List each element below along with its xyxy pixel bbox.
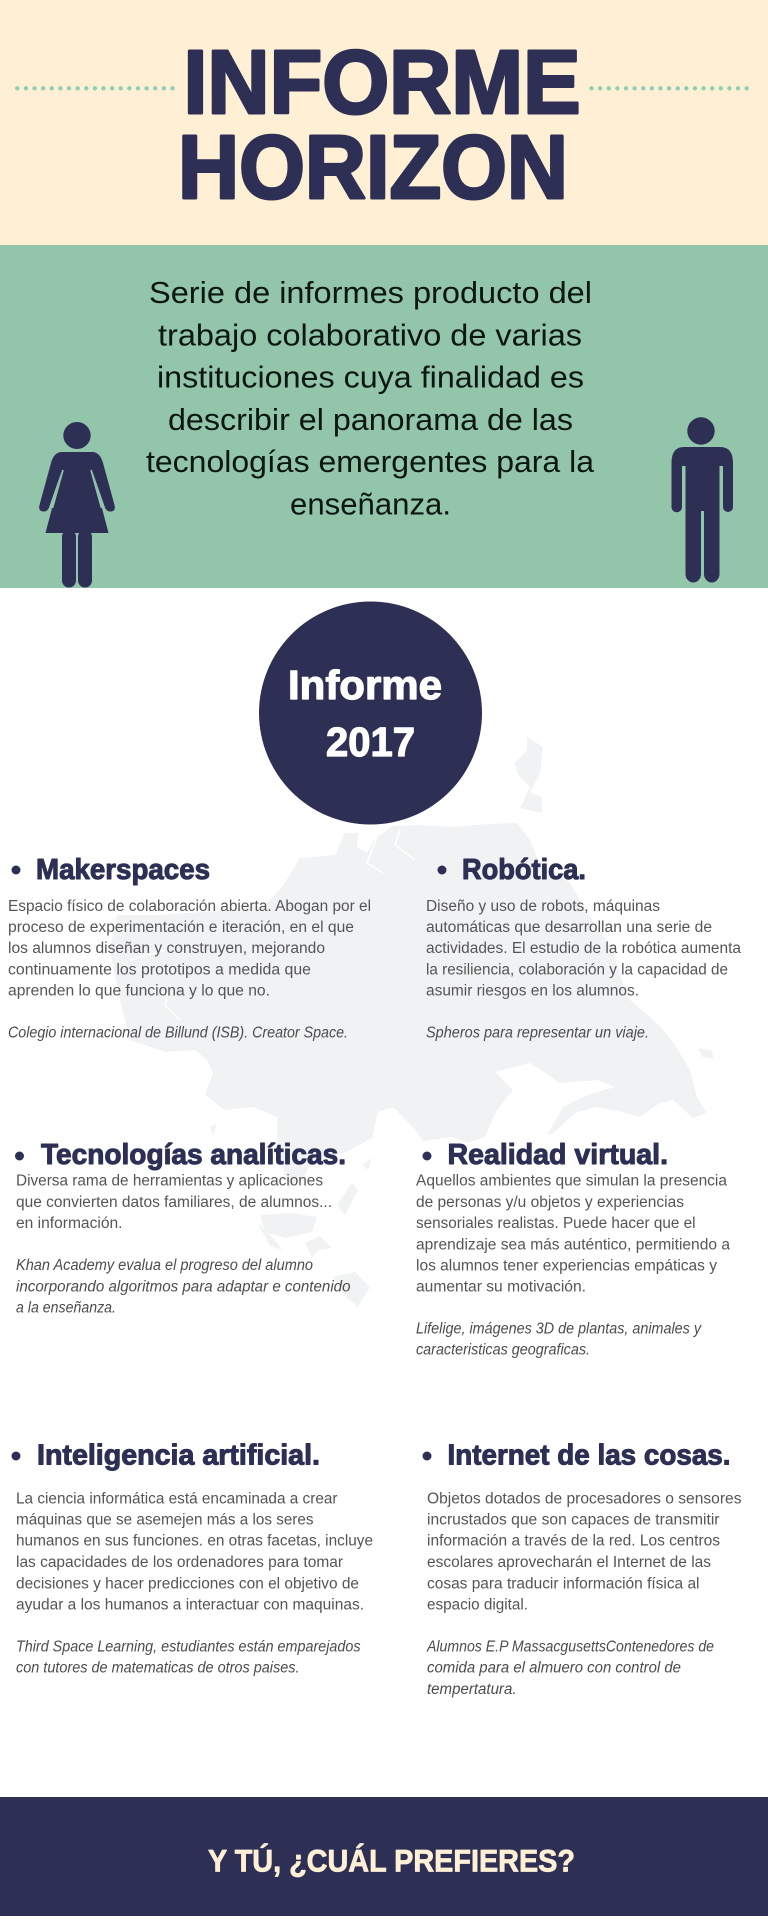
section: Internet de las cosas: Alumnos E.P MassacgusettsContenedores de (426, 1638, 714, 1655)
section: Internet de las cosas: incrustados que son capaces de transmitir (427, 1512, 720, 1529)
section: Makerspaces: Espacio físico de colaboración abierta. Abogan por el (8, 898, 371, 915)
dotted line right (592, 86, 747, 91)
circle badge: Informe 2017 (259, 602, 482, 824)
section: Makerspaces: Makerspaces (36, 854, 210, 886)
section: Robótica: Spheros para representar un viaje. (426, 1025, 649, 1042)
section: Robótica: actividades. El estudio de la robótica aumenta (426, 940, 741, 957)
section: Inteligencia artificial: Inteligencia artificial. (37, 1440, 320, 1472)
title: HORIZON (178, 118, 568, 218)
title (178, 33, 580, 218)
section: Inteligencia artificial: La ciencia informática está encaminada a crear (16, 1490, 338, 1507)
section: Tecnologías analíticas: Tecnologías analíticas. (41, 1139, 346, 1171)
section: Inteligencia artificial (12, 1440, 373, 1677)
intro text: describir el panorama de las (168, 402, 573, 437)
section: Realidad virtual: de personas y/u objetos y experiencias (416, 1194, 684, 1211)
section: Robótica: la resiliencia, colaboración y la capacidad de (426, 962, 728, 978)
panel: header (0, 0, 768, 245)
section: Tecnologías analíticas (15, 1139, 351, 1316)
section: Tecnologías analíticas: incorporando algoritmos para adaptar e contenido (16, 1278, 351, 1295)
section: Makerspaces: continuamente los prototipos a medida que (8, 962, 311, 978)
section: Internet de las cosas: cosas para traducir información física al (427, 1575, 700, 1592)
section: Inteligencia artificial: con tutores de matematicas de otros paises. (16, 1660, 300, 1677)
icon: woman (39, 422, 115, 588)
section: Inteligencia artificial: Third Space Learning, estudiantes están emparejados (16, 1638, 361, 1655)
section: Inteligencia artificial: las capacidades de los ordenadores para tomar (16, 1554, 343, 1571)
section: Robótica: automáticas que desarrollan una serie de (426, 919, 712, 936)
section: Realidad virtual: Realidad virtual. (448, 1139, 668, 1171)
background world map (110, 737, 714, 1307)
section: Makerspaces: proceso de experimentación e iteración, en el que (8, 919, 354, 936)
section: Internet de las cosas: Internet de las cosas. (448, 1440, 730, 1472)
section: Makerspaces (8, 854, 371, 1042)
panel: introduction (0, 245, 768, 588)
section: Inteligencia artificial: máquinas que se asemejen más a los seres (16, 1512, 314, 1529)
intro text: enseñanza. (290, 486, 451, 522)
section: Internet de las cosas: tempertatura. (427, 1681, 516, 1698)
icon: man (672, 417, 733, 582)
section: Internet de las cosas: comida para el almuero con control de (427, 1660, 681, 1677)
section: Makerspaces: los alumnos diseñan y construyen, mejorando (8, 940, 325, 957)
section: Internet de las cosas: información a través de la red. Los centros (427, 1533, 720, 1550)
section: Inteligencia artificial: ayudar a los humanos a interactuar con maquinas. (16, 1596, 364, 1613)
section: Makerspaces: Colegio internacional de Billund (ISB). Creator Space. (8, 1025, 348, 1042)
section: Tecnologías analíticas: en información. (16, 1215, 122, 1232)
circle badge: Informe 2017: Informe (288, 662, 442, 708)
section: Internet de las cosas (422, 1440, 742, 1698)
footer banner (0, 1797, 768, 1916)
title: INFORME (184, 33, 580, 133)
section: Realidad virtual: sensoriales realistas. Puede hacer que el (416, 1215, 696, 1232)
section: Realidad virtual (416, 1139, 730, 1359)
section: Realidad virtual: aprendizaje sea más auténtico, permitiendo a (416, 1236, 730, 1253)
dotted line left (17, 86, 172, 91)
section: Robótica (426, 854, 741, 1042)
section: Inteligencia artificial: humanos en sus funciones. en otras facetas, incluye (16, 1533, 373, 1550)
section: Tecnologías analíticas: Diversa rama de herramientas y aplicaciones (16, 1173, 323, 1190)
section: Tecnologías analíticas: a la enseñanza. (16, 1299, 116, 1316)
section: Realidad virtual: Lifelige, imágenes 3D de plantas, animales y (416, 1320, 702, 1337)
section: Realidad virtual: aumentar su motivación. (416, 1278, 586, 1296)
section: Realidad virtual: Aquellos ambientes que simulan la presencia (416, 1173, 727, 1190)
section: Realidad virtual: los alumnos tener experiencias empáticas y (416, 1258, 717, 1274)
intro text: Serie de informes producto del (149, 275, 592, 310)
section: Robótica: Diseño y uso de robots, máquinas (426, 898, 660, 915)
section: Tecnologías analíticas: Khan Academy evalua el progreso del alumno (16, 1257, 313, 1274)
section: Internet de las cosas: escolares aprovecharán el Internet de las (427, 1554, 711, 1571)
section: Internet de las cosas: espacio digital. (427, 1596, 528, 1613)
intro text: trabajo colaborativo de varias (158, 318, 582, 352)
intro text: instituciones cuya finalidad es (157, 360, 584, 395)
footer banner: Y TÚ, ¿CUÁL PREFIERES? (208, 1843, 575, 1879)
section: Robótica: asumir riesgos en los alumnos. (426, 983, 639, 1000)
section: Tecnologías analíticas: que convierten datos familiares, de alumnos... (16, 1194, 332, 1211)
section: Realidad virtual: caracteristicas geograficas. (416, 1342, 590, 1359)
section: Makerspaces: aprenden lo que funciona y lo que no. (8, 983, 270, 1000)
circle badge: Informe 2017: 2017 (326, 719, 415, 765)
section: Internet de las cosas: Objetos dotados de procesadores o sensores (427, 1490, 742, 1507)
section: Inteligencia artificial: decisiones y hacer predicciones con el objetivo de (16, 1575, 359, 1592)
intro text (146, 275, 595, 522)
section: Robótica: Robótica. (462, 854, 586, 886)
intro text: tecnologías emergentes para la (146, 444, 595, 479)
